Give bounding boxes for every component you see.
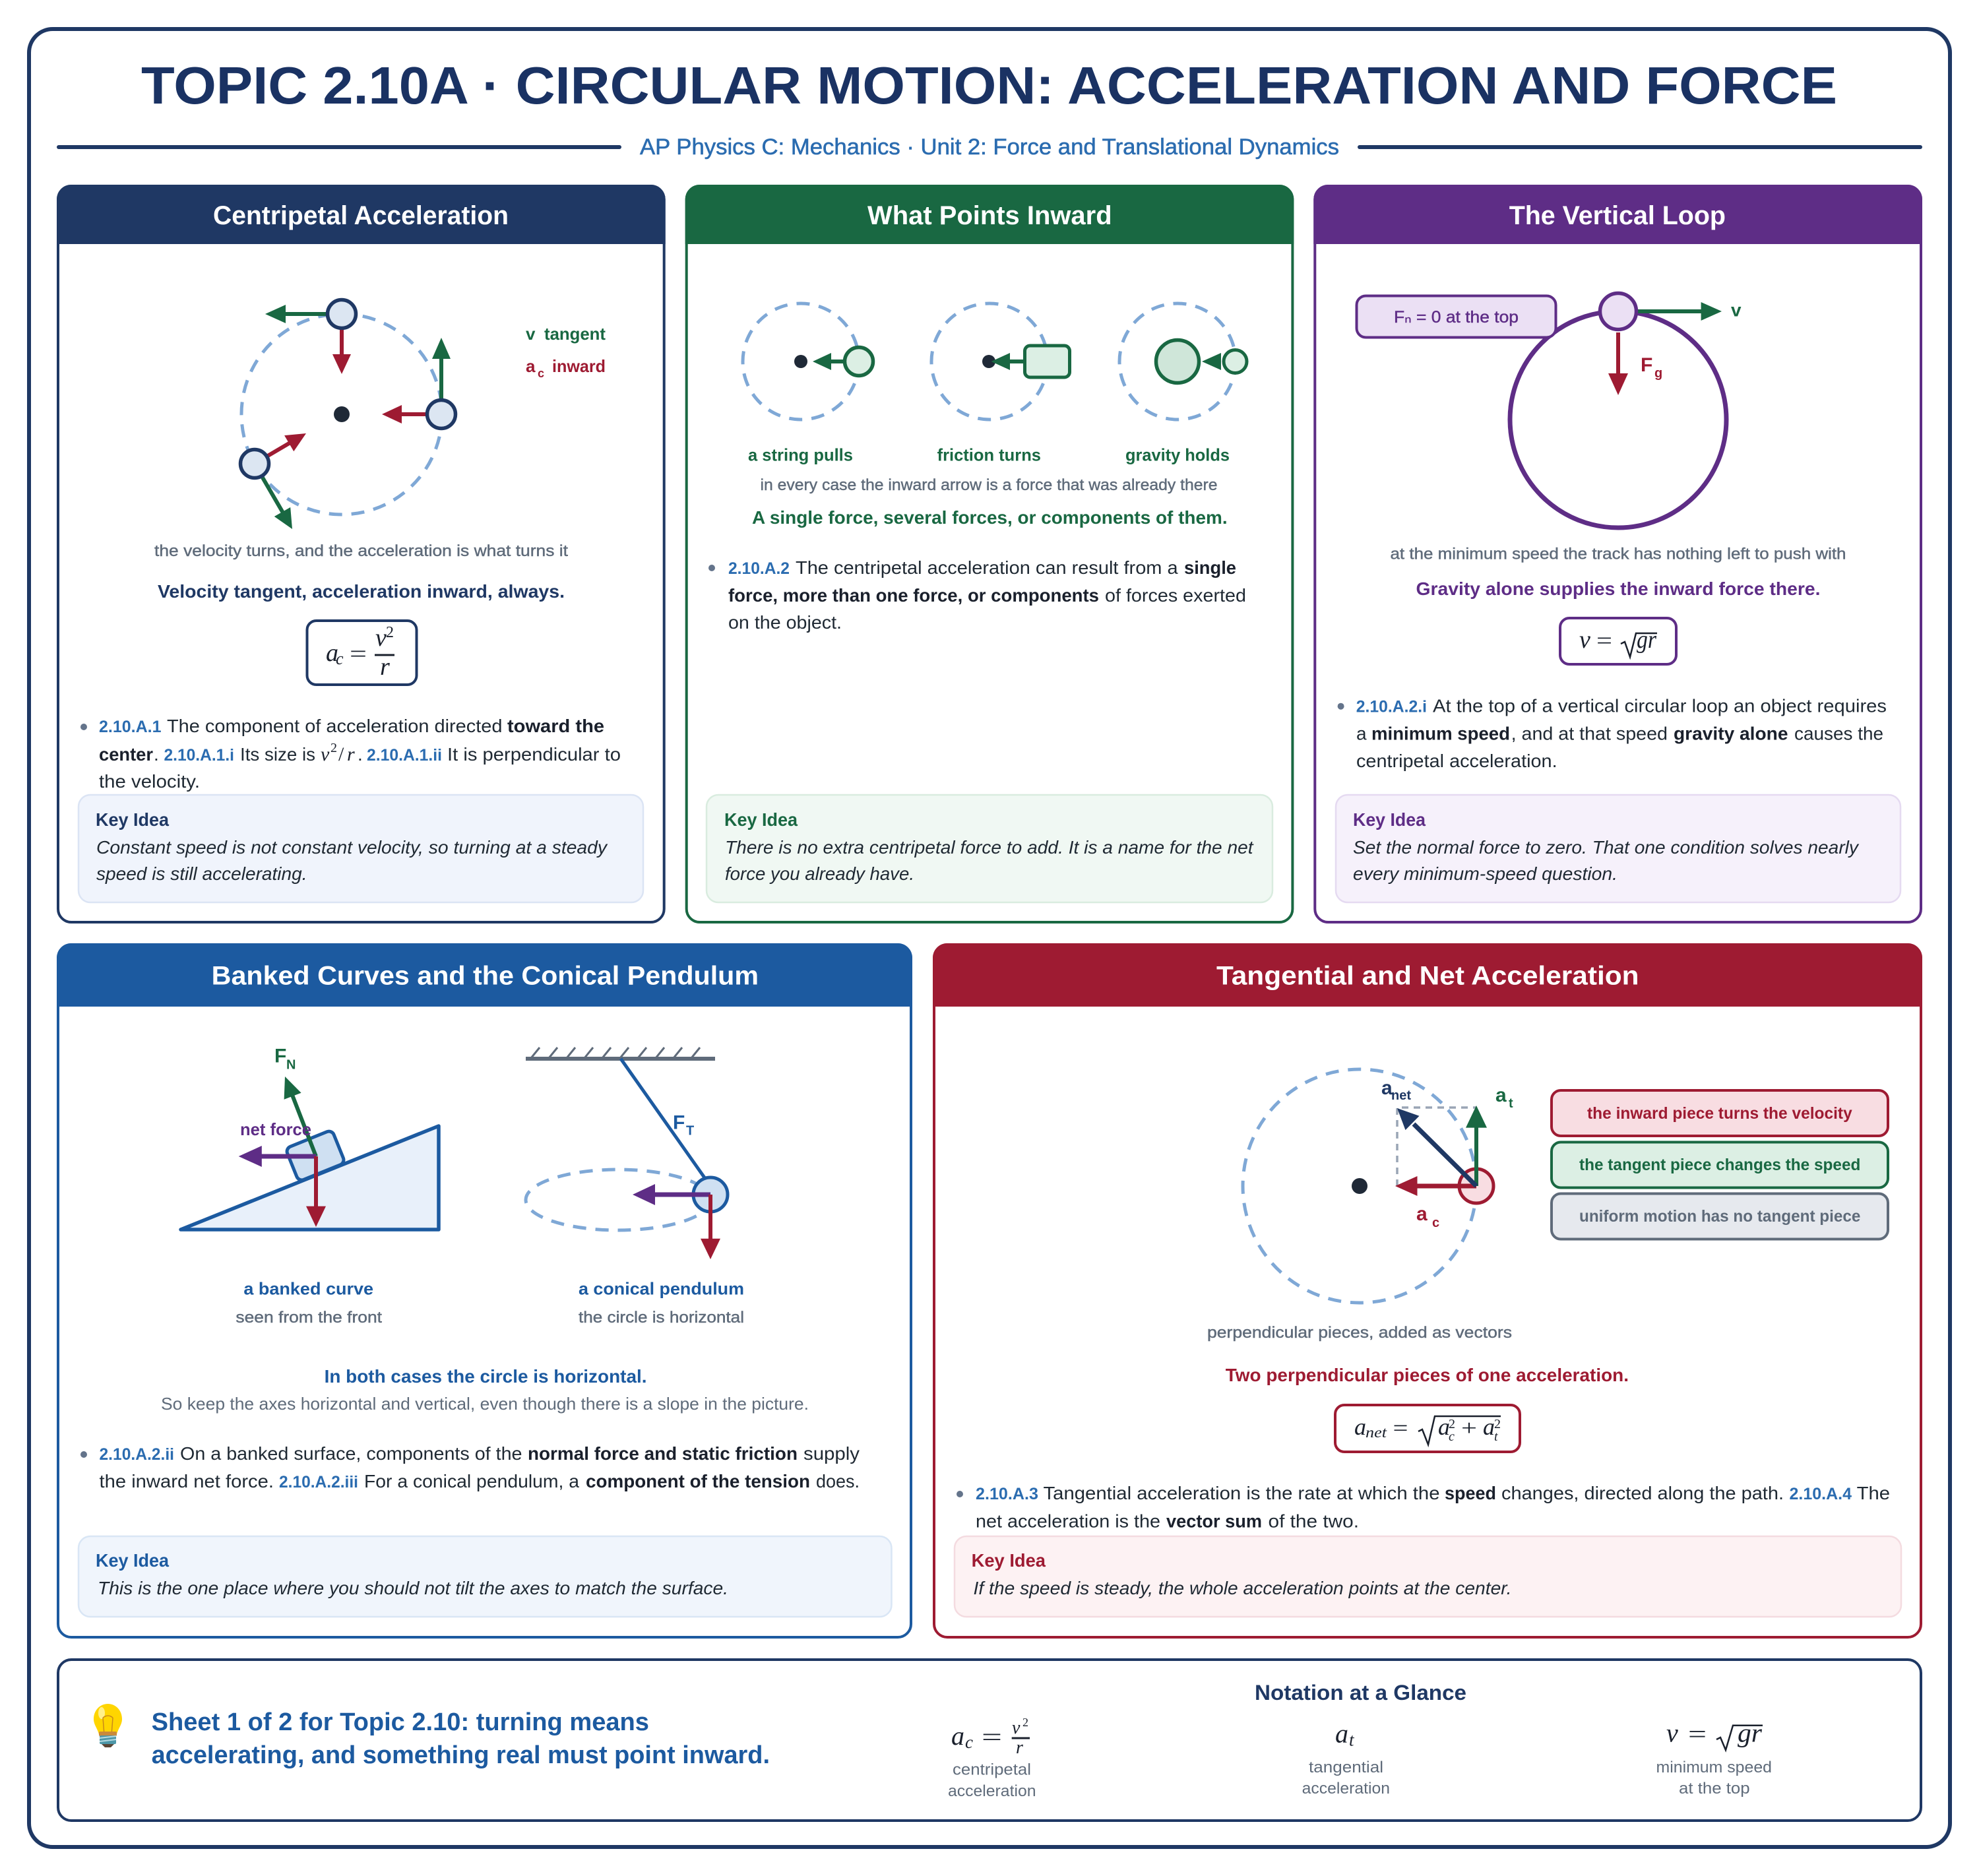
notation: centripetal acceleration: centripetal: [953, 1761, 1031, 1779]
heading: what points inward: What Points Inward: [867, 201, 1112, 230]
notation: centripetal acceleration: r: [1016, 1737, 1023, 1758]
bullet text: 2.10.A.2.i: [1356, 697, 1427, 716]
bullet text: toward the: [507, 716, 604, 736]
bullet text: On a banked surface, components of the: [180, 1443, 522, 1464]
notation: tangential acceleration: t: [1349, 1730, 1355, 1750]
callout: normal force zero: [1356, 296, 1555, 338]
key idea: Key Idea: [96, 1550, 169, 1571]
heading: the vertical loop: The Vertical Loop: [1509, 201, 1726, 230]
bullet text: .: [358, 744, 363, 765]
callout: normal force zero: Fₙ = 0 at the top: [1394, 308, 1519, 327]
label: Fg: g: [1654, 366, 1662, 381]
key idea: Constant speed is not constant velocity, so turning at a steady: [96, 837, 608, 858]
key idea: If the speed is steady, the whole acceleration points at the center.: [974, 1578, 1512, 1598]
label: FT: F: [673, 1112, 685, 1133]
caption: in every case the inward arrow is a force that was already there: [760, 476, 1218, 494]
notation: centripetal acceleration: =: [982, 1724, 1002, 1751]
bullet text: 2.10.A.4: [1789, 1485, 1852, 1503]
bullet text: on the object.: [728, 612, 842, 633]
notation: minimum speed: [1656, 1718, 1772, 1798]
legend: v: [526, 324, 536, 344]
diagram: banked curve: [181, 1045, 439, 1230]
bullet text: [80, 1443, 860, 1491]
key idea: [79, 1536, 892, 1617]
arrow: tangential acceleration: [1466, 1106, 1487, 1186]
arrow: velocity at top: [265, 305, 327, 323]
label: FT: T: [686, 1124, 694, 1139]
closing message: Sheet 1 of 2 for Topic 2.10: turning means: [152, 1708, 649, 1736]
labels under diagrams: the circle is horizontal: [579, 1309, 744, 1327]
bullet text: the velocity.: [99, 771, 200, 792]
diagram: conical pendulum: [526, 1047, 728, 1259]
arrow: centripetal acceleration: [1395, 1176, 1476, 1196]
arrow: velocity at lower left: [263, 478, 292, 529]
pill: inward piece: [1552, 1090, 1888, 1136]
label: FN: F: [274, 1045, 286, 1067]
bullet text: [957, 1483, 1890, 1532]
labels under diagrams: gravity holds: [1125, 445, 1230, 464]
balls on circle: [240, 299, 455, 478]
diagram: acceleration components: [1243, 1069, 1513, 1303]
formula box: c: [1449, 1429, 1455, 1444]
bullet text: , and at that speed: [1511, 724, 1668, 744]
bullet text: speed: [1445, 1483, 1496, 1503]
label: a c: c: [1432, 1216, 1439, 1230]
formula box: =: [1596, 627, 1612, 654]
takeaway: Gravity alone supplies the inward force there.: [1416, 578, 1821, 599]
heading: banked curves: [57, 943, 912, 1007]
arrow: weight: [306, 1156, 326, 1227]
formula box: r: [380, 653, 390, 681]
bullet text: 2.10.A.2: [728, 559, 790, 578]
caption: So keep the axes horizontal and vertical, even though there is a slope in the picture.: [161, 1394, 809, 1414]
diagram: friction turns: [931, 303, 1070, 420]
notation: minimum speed: v: [1666, 1718, 1678, 1748]
bullet text: It is perpendicular to: [447, 744, 621, 765]
bullet text: centripetal acceleration.: [1356, 751, 1557, 771]
label: a t: a: [1495, 1084, 1507, 1106]
label: a c: a: [1416, 1203, 1428, 1225]
bullet text: At the top of a vertical circular loop an object requires: [1433, 695, 1887, 716]
key idea: [955, 1536, 1901, 1617]
labels under diagrams: [236, 1279, 744, 1327]
arrow: net inward force: [633, 1184, 710, 1205]
bullet text: vector sum: [1166, 1511, 1262, 1532]
arrow: acceleration at top: [332, 329, 351, 374]
label: a c: [1416, 1203, 1439, 1230]
heading: the vertical loop: [1313, 185, 1922, 244]
label: FN: N: [286, 1058, 296, 1073]
label: a t: t: [1509, 1096, 1513, 1111]
label: net force: net force: [240, 1119, 311, 1139]
bullet text: does.: [816, 1471, 860, 1491]
bullet text: causes the: [1794, 724, 1883, 744]
bullet text: center: [99, 744, 153, 765]
bullet text: 2: [330, 741, 337, 755]
formula box: gr: [1637, 626, 1656, 654]
formula box: 2: [1449, 1417, 1455, 1431]
notation: centripetal acceleration: c: [965, 1732, 973, 1752]
bullet text: changes, directed along the path.: [1501, 1483, 1784, 1503]
bullet text: Its size is: [240, 744, 315, 765]
bullet text: /: [338, 743, 344, 765]
bullet text: [80, 716, 621, 792]
bullet text: The centripetal acceleration can result from a: [796, 557, 1178, 578]
formula box: a: [1354, 1414, 1366, 1440]
label: Fg: F: [1641, 354, 1652, 376]
pill: uniform motion: [1552, 1194, 1888, 1239]
bullet text: 2.10.A.2.iii: [279, 1473, 358, 1491]
labels under diagrams: a string pulls: [748, 445, 853, 464]
key idea: every minimum-speed question.: [1353, 863, 1618, 884]
labels under diagrams: a banked curve: [243, 1279, 373, 1299]
pill: tangent piece: the tangent piece changes the speed: [1579, 1156, 1860, 1174]
formula box: a: [1438, 1414, 1450, 1440]
notation: minimum speed: gr: [1738, 1718, 1762, 1748]
caption: the velocity turns, and the acceleration is what turns it: [154, 542, 568, 560]
formula box: 2: [1494, 1417, 1501, 1431]
formula box: net: [1366, 1424, 1387, 1441]
formula box: 2: [386, 624, 394, 641]
bullet text: a: [1356, 724, 1367, 744]
heading: centripetal acceleration: [57, 185, 666, 244]
key idea: Key Idea: [724, 809, 798, 830]
notation: centripetal acceleration: v: [1012, 1718, 1021, 1738]
bullet text: gravity alone: [1674, 724, 1788, 744]
bullet text: 2.10.A.1.i: [164, 746, 234, 765]
labels under diagrams: a conical pendulum: [579, 1279, 744, 1299]
label: Fg: [1641, 354, 1662, 381]
bullet text: net acceleration is the: [976, 1511, 1160, 1532]
bullet text: the inward net force.: [99, 1471, 274, 1491]
arrow: gravity: [1608, 332, 1628, 395]
notation: minimum speed: at the top: [1679, 1780, 1750, 1798]
formula box: t: [1494, 1429, 1498, 1444]
notation: minimum speed: =: [1688, 1721, 1707, 1749]
heading: tangential and net acceleration: Tangential and Net Acceleration: [1216, 962, 1639, 991]
bullet text: single: [1184, 557, 1236, 578]
key idea: Key Idea: [972, 1550, 1046, 1571]
diagram: gravity holds: [1119, 303, 1247, 420]
heading: centripetal acceleration: Centripetal Acceleration: [213, 201, 509, 230]
panel: footer: [58, 1660, 1921, 1821]
caption: perpendicular pieces, added as vectors: [1207, 1324, 1512, 1342]
panel: what points inward: [685, 185, 1294, 922]
diagram: string pulls: [743, 303, 873, 420]
subtitle: AP Physics C: Mechanics · Unit 2: Force and Translational Dynamics: [640, 135, 1339, 160]
diagram: velocity and acceleration around a circle: [240, 299, 606, 529]
key idea: Set the normal force to zero. That one condition solves nearly: [1353, 837, 1860, 858]
notation: centripetal acceleration: [948, 1716, 1036, 1800]
labels under diagrams: friction turns: [937, 445, 1041, 464]
formula box: v: [375, 624, 387, 652]
label: a net: net: [1391, 1088, 1411, 1103]
bullet text: 2.10.A.1: [99, 718, 162, 736]
bullet text: normal force and static friction: [528, 1443, 798, 1464]
arrow: acceleration at lower left: [268, 433, 306, 456]
panel: banked curves and the conical pendulum: [57, 943, 912, 1637]
subtitle: [57, 135, 1922, 160]
formula box: =: [350, 641, 367, 667]
bullet text: [1338, 695, 1887, 771]
bullet text: component of the tension: [586, 1471, 810, 1491]
bullet text: The component of acceleration directed: [167, 716, 503, 736]
label: a net: a: [1381, 1077, 1393, 1099]
legend: c: [538, 367, 544, 380]
formula box: v: [1579, 626, 1590, 654]
bullet text: The: [1857, 1483, 1890, 1503]
notation heading: Notation at a Glance: [1255, 1681, 1466, 1704]
bullet text: force, more than one force, or components: [728, 585, 1099, 606]
icon: light bulb: [94, 1704, 122, 1747]
notation: centripetal acceleration: 2: [1022, 1716, 1028, 1729]
pill: tangent piece: [1552, 1142, 1888, 1187]
takeaway: In both cases the circle is horizontal.: [325, 1366, 646, 1387]
legend: inward: [552, 356, 606, 376]
formula box: =: [1393, 1416, 1408, 1441]
formula box: a: [326, 639, 338, 667]
closing message: accelerating, and something real must point inward.: [152, 1741, 770, 1769]
diagram: vertical loop: [1356, 293, 1742, 528]
arrow: velocity at right: [432, 338, 451, 399]
key idea: There is no extra centripetal force to add. It is a name for the net: [725, 837, 1254, 858]
formula box: c: [336, 649, 344, 668]
notation: tangential acceleration: tangential: [1309, 1759, 1383, 1776]
legend: tangent: [544, 324, 606, 344]
heading: banked curves: Banked Curves and the Conical Pendulum: [212, 962, 759, 991]
notation: minimum speed: minimum speed: [1656, 1759, 1772, 1776]
arrow: acceleration at right: [382, 405, 427, 423]
bullet text: v: [321, 743, 330, 765]
closing message: [152, 1708, 770, 1769]
takeaway: A single force, several forces, or components of them.: [752, 507, 1228, 528]
formula box: [1335, 1405, 1520, 1452]
bullet text: of the two.: [1268, 1511, 1359, 1532]
bullet text: of forces exerted: [1105, 585, 1246, 606]
legend: a: [526, 356, 536, 376]
key idea: [707, 795, 1272, 902]
bullet text: supply: [803, 1443, 860, 1464]
labels under diagrams: [748, 445, 1230, 464]
arrow: net force: [239, 1146, 316, 1167]
formula box: [307, 621, 417, 685]
labels under diagrams: seen from the front: [236, 1309, 382, 1327]
pill: inward piece: the inward piece turns the velocity: [1587, 1104, 1852, 1123]
key idea: speed is still accelerating.: [96, 863, 307, 884]
formula box: +: [1461, 1416, 1477, 1441]
notation: tangential acceleration: acceleration: [1302, 1780, 1390, 1798]
label: a t: [1495, 1084, 1513, 1111]
key idea: Key Idea: [1353, 809, 1426, 830]
key idea: Key Idea: [96, 809, 169, 830]
bullet text: 2.10.A.2.ii: [99, 1445, 174, 1464]
arrow: net acceleration: [1397, 1108, 1476, 1186]
bullet text: .: [154, 744, 159, 765]
bullet text: [708, 557, 1246, 633]
key idea: [1336, 795, 1900, 902]
takeaway: Two perpendicular pieces of one acceleration.: [1226, 1365, 1629, 1385]
caption: at the minimum speed the track has nothing left to push with: [1391, 545, 1846, 563]
key idea: force you already have.: [725, 863, 914, 884]
panel: tangential and net acceleration: [933, 943, 1922, 1637]
label: FN: [274, 1045, 296, 1073]
label: a net: [1381, 1077, 1411, 1103]
bullet text: For a conical pendulum, a: [364, 1471, 579, 1491]
key idea: [79, 795, 643, 902]
legend: [526, 324, 606, 380]
formula box: a: [1483, 1414, 1495, 1440]
takeaway: Velocity tangent, acceleration inward, always.: [158, 581, 565, 602]
panel: the vertical loop: [1313, 185, 1922, 922]
label: FT: [673, 1112, 694, 1139]
bullet text: r: [347, 743, 355, 765]
notation: tangential acceleration: [1302, 1719, 1390, 1798]
bullet text: Tangential acceleration is the rate at which the: [1044, 1483, 1439, 1503]
bullet text: minimum speed: [1371, 724, 1510, 744]
arrow: weight: [701, 1195, 720, 1259]
bullet text: 2.10.A.1.ii: [367, 746, 442, 765]
label: v: v: [1731, 300, 1742, 321]
formula box: [1560, 618, 1676, 664]
title: TOPIC 2.10A · CIRCULAR MOTION: ACCELERATION AND FORCE: [141, 56, 1837, 115]
heading: what points inward: [685, 185, 1294, 244]
pill: uniform motion: uniform motion has no tangent piece: [1579, 1207, 1860, 1226]
arrow: velocity: [1637, 302, 1722, 321]
notation: tangential acceleration: a: [1335, 1719, 1348, 1749]
panel: centripetal acceleration: [57, 185, 666, 922]
arrow: normal force: [284, 1077, 316, 1156]
bullet text: 2.10.A.3: [976, 1485, 1038, 1503]
key idea: This is the one place where you should not tilt the axes to match the surface.: [98, 1578, 728, 1598]
heading: tangential and net acceleration: [933, 943, 1922, 1007]
notation: centripetal acceleration: a: [951, 1721, 964, 1751]
notation: centripetal acceleration: acceleration: [948, 1782, 1036, 1800]
